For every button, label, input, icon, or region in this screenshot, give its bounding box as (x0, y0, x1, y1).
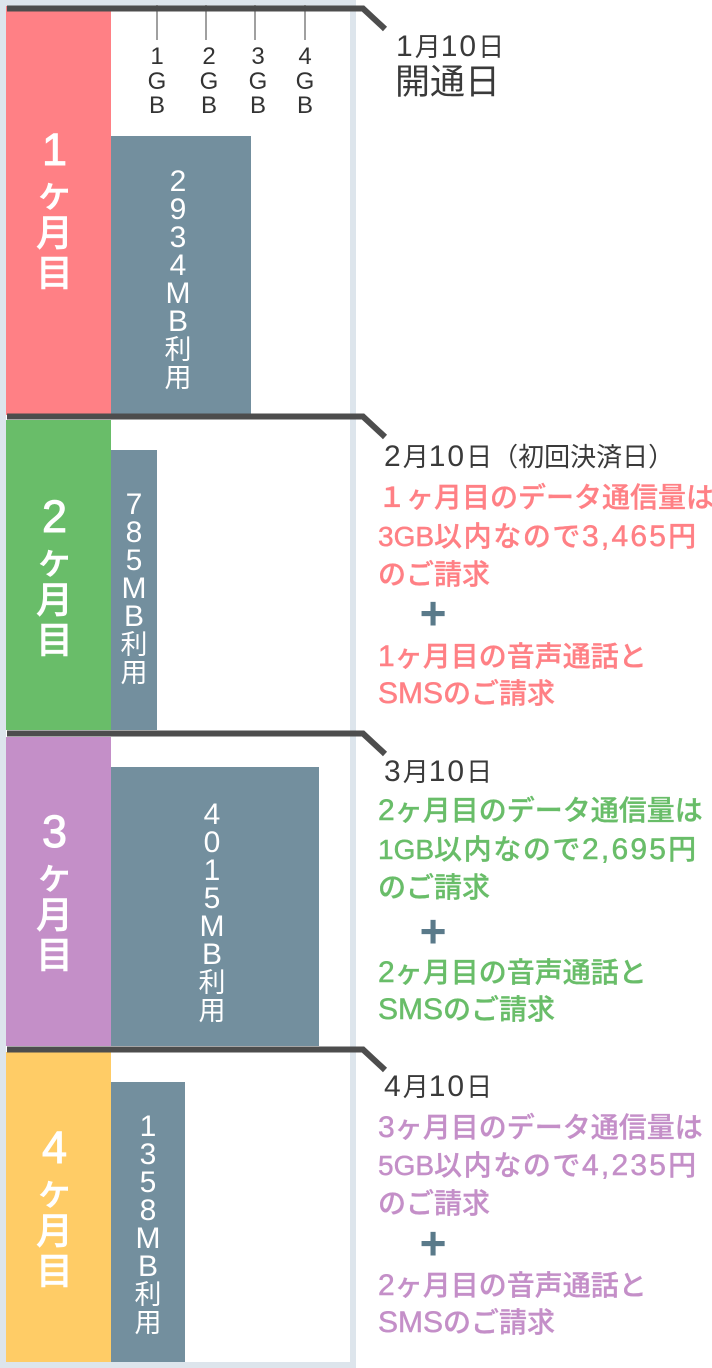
usage label month 4: B (138, 1250, 158, 1283)
month 3 label: 目 (36, 925, 73, 979)
month 4 band (6, 1052, 111, 1362)
month 1 label: 目 (36, 243, 73, 297)
usage label month 4 (134, 1110, 162, 1340)
usage label month 1: 用 (164, 356, 192, 395)
usage label month 4: 3 (140, 1138, 156, 1171)
month 3 label: 月 (36, 885, 73, 939)
heading: opening day: 開通日 (395, 54, 500, 105)
usage label month 2: 利 (120, 623, 148, 662)
month 4 label (36, 1122, 73, 1295)
axis label 1GB: G (148, 68, 166, 94)
axis label 2GB: B (201, 92, 217, 119)
usage label month 4: 利 (134, 1273, 162, 1312)
month 3 label: 3 (42, 806, 67, 857)
usage label month 1: 9 (170, 193, 186, 226)
usage label month 2: M (122, 572, 146, 605)
usage label month 4: M (136, 1222, 160, 1255)
axis tick 2GB (205, 5, 207, 40)
usage label month 2: 用 (120, 651, 148, 690)
usage label month 2: B (124, 600, 144, 633)
axis label 2GB: G (200, 68, 218, 94)
usage label month 2: 7 (126, 488, 142, 521)
usage label month 3: 1 (204, 854, 220, 887)
axis label 4GB: B (297, 92, 313, 119)
billing text month 3: 1GB以内なので2,695円 (378, 828, 696, 868)
month 2 label: 月 (36, 570, 73, 624)
axis label 2GB (200, 43, 218, 119)
usage label month 1: B (168, 305, 188, 338)
usage label month 4: 8 (140, 1194, 156, 1227)
date: Apr 10: 4月10日 (384, 1067, 492, 1104)
billing text month 3: のご請求 (378, 866, 490, 906)
usage label month 2: 8 (126, 516, 142, 549)
chart frame (0, 0, 356, 1368)
date: opening day: 1月10日 (396, 27, 504, 64)
billing text month 4: + (420, 1217, 446, 1269)
month 2 label: 目 (36, 610, 73, 664)
month 1 label (36, 124, 73, 297)
axis tick 3GB (254, 5, 256, 40)
axis tick 1GB (156, 5, 158, 40)
date: Mar 10: 3月10日 (384, 752, 492, 789)
billing text month 3 (378, 789, 703, 1028)
month 4 label: 4 (42, 1122, 67, 1173)
billing text month 3: SMSのご請求 (378, 988, 555, 1028)
usage label month 3: 4 (204, 798, 220, 831)
usage label month 1: 4 (170, 249, 186, 282)
usage label month 4: 5 (140, 1166, 156, 1199)
usage label month 1: 3 (170, 221, 186, 254)
month 1 label: ヶ (36, 163, 73, 217)
month 3 label: ヶ (36, 845, 73, 899)
billing text month 2: 3GB以内なので3,465円 (378, 515, 696, 555)
usage label month 3: 用 (198, 989, 226, 1028)
axis label 1GB: 1 (150, 43, 164, 70)
billing text month 3: + (420, 905, 446, 957)
usage label month 3: 0 (204, 826, 220, 859)
month 2 label: ヶ (36, 530, 73, 584)
billing text month 4: 5GB以内なので4,235円 (378, 1144, 696, 1184)
usage label month 1: 2 (170, 165, 186, 198)
month 1 band (6, 6, 111, 415)
usage label month 2: 5 (126, 544, 142, 577)
axis label 1GB (148, 43, 166, 119)
axis label 3GB (249, 43, 267, 119)
month 1 label: 1 (42, 124, 67, 175)
axis label 1GB: B (149, 92, 165, 119)
usage bar month 4 (111, 1082, 185, 1362)
billing text month 4: 3ヶ月目のデータ通信量は (378, 1106, 703, 1146)
axis label 4GB: 4 (298, 43, 312, 70)
billing text month 4: のご請求 (378, 1182, 490, 1222)
billing text month 2: １ヶ月目のデータ通信量は (378, 476, 712, 516)
month 3 label (36, 806, 73, 979)
axis label 2GB: 2 (202, 43, 216, 70)
month 4 label: 目 (36, 1241, 73, 1295)
date: Feb 10: 2月10日（初回決済日） (384, 437, 674, 474)
axis tick 4GB (304, 5, 306, 40)
billing text month 4: SMSのご請求 (378, 1301, 555, 1341)
axis label 3GB: B (250, 92, 266, 119)
usage bar month 2 (111, 450, 157, 730)
month 4 label: ヶ (36, 1161, 73, 1215)
usage label month 4: 1 (140, 1110, 156, 1143)
billing text month 2: SMSのご請求 (378, 672, 555, 712)
billing text month 2: のご請求 (378, 553, 490, 593)
usage label month 1: 利 (164, 328, 192, 367)
usage label month 3: M (200, 910, 224, 943)
usage label month 4: 用 (134, 1301, 162, 1340)
month 2 label (36, 491, 73, 664)
usage label month 3: B (202, 938, 222, 971)
usage bar month 3 (111, 767, 319, 1046)
month 2 band (6, 420, 111, 730)
month 4 label: 月 (36, 1201, 73, 1255)
axis label 3GB: 3 (251, 43, 265, 70)
billing text month 2: + (420, 587, 446, 639)
usage bar month 1 (111, 136, 251, 415)
billing text month 3: 2ヶ月目の音声通話と (378, 951, 647, 991)
usage label month 3: 5 (204, 882, 220, 915)
billing text month 4: 2ヶ月目の音声通話と (378, 1264, 647, 1304)
axis label 4GB (296, 43, 314, 119)
month 2 label: 2 (42, 491, 67, 542)
usage label month 1: M (166, 277, 190, 310)
usage label month 3: 利 (198, 961, 226, 1000)
billing text month 3: 2ヶ月目のデータ通信量は (378, 789, 703, 829)
axis label 3GB: G (249, 68, 267, 94)
month 3 band (6, 737, 111, 1046)
usage label month 3 (198, 798, 226, 1028)
billing text month 2: 1ヶ月目の音声通話と (378, 635, 647, 675)
axis label 4GB: G (296, 68, 314, 94)
month 1 label: 月 (36, 203, 73, 257)
usage label month 1 (164, 165, 192, 395)
usage label month 2 (120, 488, 148, 690)
billing text month 2 (378, 476, 712, 712)
